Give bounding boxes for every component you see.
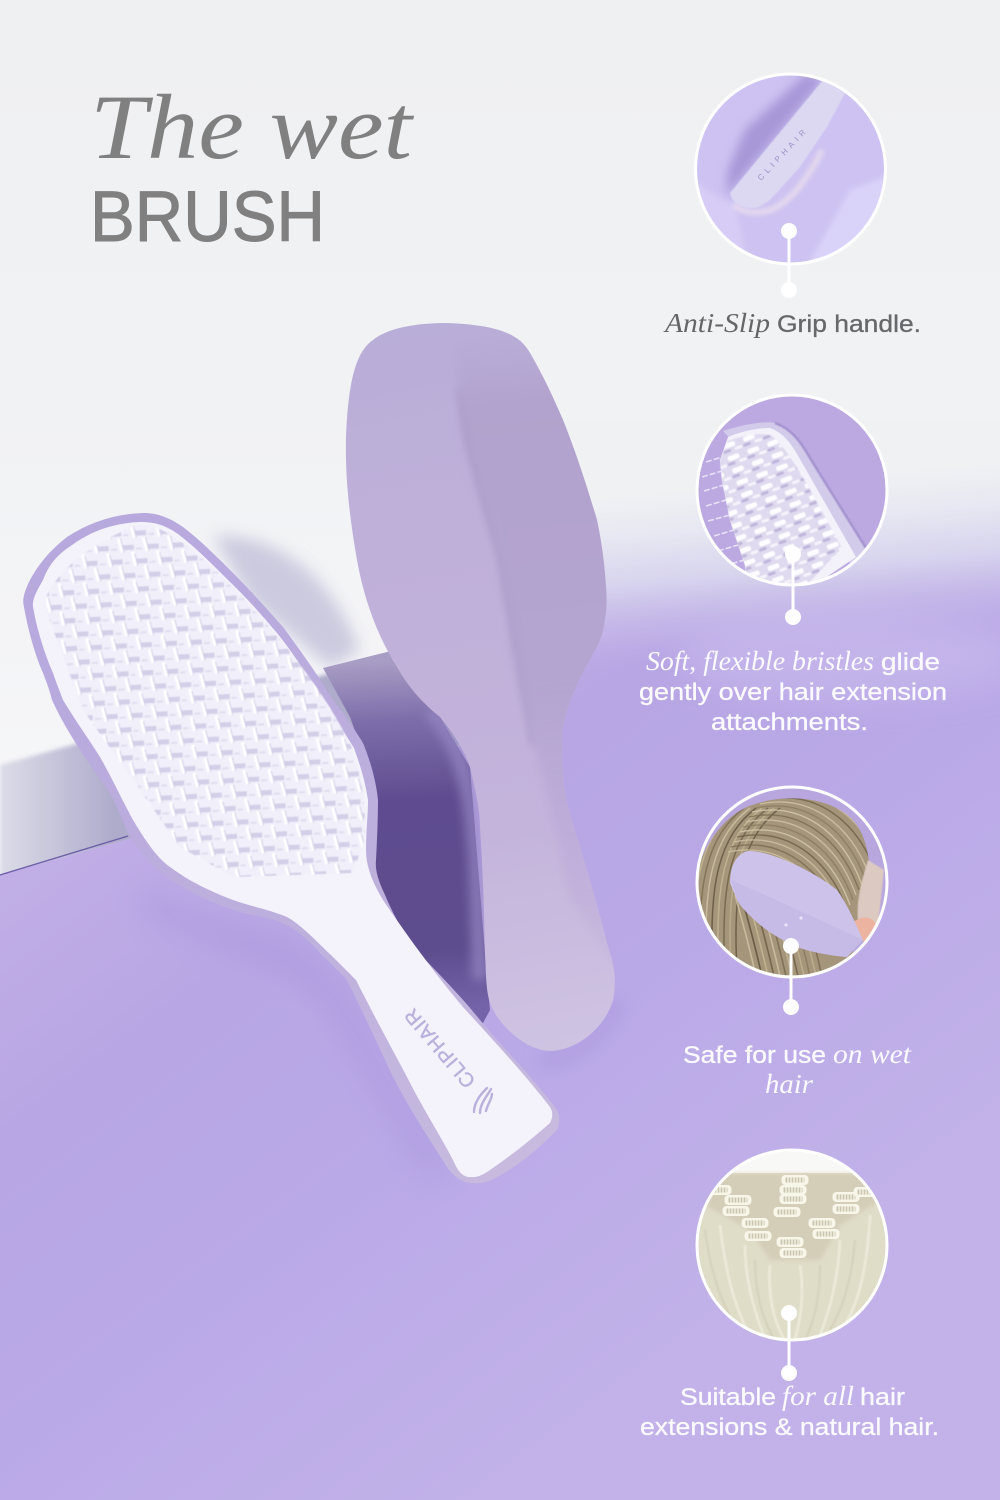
caption <box>683 1039 913 1099</box>
brush back shaded face <box>456 355 606 864</box>
background: floor edge <box>0 836 128 875</box>
caption: hair <box>860 1384 905 1411</box>
title script line: The wet <box>90 76 415 178</box>
callout connector <box>790 946 792 1007</box>
brush: front view with bristles <box>23 513 559 1183</box>
background: floor <box>0 420 1000 1500</box>
callout dot top <box>785 546 801 562</box>
logo: swoosh <box>474 1088 492 1113</box>
title sans line: BRUSH <box>90 178 325 257</box>
caption <box>663 308 921 338</box>
caption: gently over hair extension <box>639 679 947 706</box>
hair <box>698 798 869 976</box>
hand <box>853 917 876 941</box>
logo: handle wordmark: CLIPHAIR <box>401 1004 480 1092</box>
caption: Grip handle. <box>777 311 921 338</box>
brush rim <box>23 513 559 1183</box>
caption: Suitable <box>680 1384 776 1411</box>
callout connector <box>788 231 790 290</box>
callout connector <box>792 554 794 617</box>
callout connector <box>788 1313 790 1373</box>
circle photo: handle close-up <box>697 76 884 262</box>
circle ring <box>696 74 886 264</box>
caption: glide <box>881 649 940 676</box>
handle wordmark: CLIPHAIR <box>756 128 808 182</box>
caption <box>640 1381 939 1441</box>
callout dot top <box>781 1305 797 1321</box>
caption: extensions & natural hair. <box>640 1414 939 1441</box>
caption: Anti-Slip <box>663 308 770 338</box>
feature 4: all hair extensions <box>640 1145 939 1441</box>
caption: attachments. <box>711 709 868 736</box>
brush on hair <box>730 851 863 957</box>
caption: on wet <box>833 1039 913 1069</box>
brush white face <box>33 522 552 1177</box>
caption: hair <box>765 1069 814 1099</box>
callout dot bottom <box>781 1365 797 1381</box>
background: floor highlight <box>680 610 1000 700</box>
background: right side wall fade <box>500 420 1000 700</box>
circle photo: bristles close-up <box>698 396 886 584</box>
skin <box>858 860 884 925</box>
brush bristle field <box>46 524 365 877</box>
hair clips <box>704 1175 880 1258</box>
title <box>90 76 415 257</box>
circle ring <box>697 395 887 585</box>
callout dot bottom <box>781 282 797 298</box>
callout dot top <box>783 938 799 954</box>
feature 3: safe on wet hair <box>684 786 912 1094</box>
feature 1: anti-slip grip <box>663 70 921 338</box>
feature 2: soft bristles <box>639 390 947 736</box>
callout dot bottom <box>785 609 801 625</box>
circle ring <box>697 1150 887 1340</box>
caption: for all <box>782 1381 854 1411</box>
background: wall <box>0 0 1000 900</box>
caption: Soft, flexible bristles <box>646 646 874 676</box>
circle photo: clip-in extensions <box>698 1152 886 1338</box>
circle photo: brushing wet hair <box>698 789 886 976</box>
brush back main face <box>346 323 615 1051</box>
circle ring <box>697 787 887 977</box>
callout dot bottom <box>783 999 799 1015</box>
callout dot top <box>781 223 797 239</box>
shadows around brushes <box>140 535 620 1175</box>
brush: back view standing <box>346 320 640 1051</box>
caption: Safe for use <box>683 1042 826 1069</box>
caption <box>639 646 947 736</box>
background: ledge <box>0 626 500 880</box>
